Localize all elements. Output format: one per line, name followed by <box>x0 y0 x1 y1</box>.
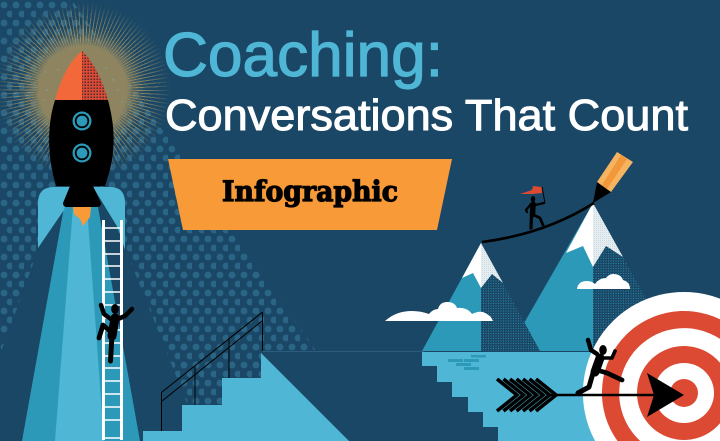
title line 1: Coaching: <box>163 21 443 90</box>
arrow <box>497 373 684 417</box>
rocket nose cone <box>55 51 108 100</box>
orange banner <box>168 159 452 230</box>
right cloud <box>577 274 630 289</box>
halo specks <box>43 67 123 103</box>
stair railing <box>162 312 262 431</box>
left staircase <box>143 353 349 441</box>
arrow shaft <box>550 394 655 396</box>
tightrope <box>482 203 594 242</box>
rocket glow halo <box>0 0 173 178</box>
tightrope walker with flag <box>520 186 545 228</box>
pencil <box>593 152 633 203</box>
small mountain <box>422 243 540 351</box>
rocket wings <box>38 187 125 250</box>
flag <box>520 186 542 194</box>
title line 2: Conversations That Count <box>165 91 688 140</box>
large mountain <box>508 203 675 351</box>
arrow head <box>647 373 684 417</box>
climbing figure <box>99 304 132 361</box>
rocket porthole bottom <box>72 144 92 162</box>
rocket body <box>49 100 114 207</box>
ladder <box>104 220 122 440</box>
rocket flame <box>73 207 91 226</box>
arrow fletching <box>497 379 556 411</box>
running figure <box>578 340 622 393</box>
rocket porthole top <box>72 112 92 130</box>
rocket <box>49 51 114 207</box>
rocket exhaust beam <box>22 207 140 441</box>
left cloud <box>385 302 493 321</box>
water ground with steps <box>422 352 720 441</box>
walker figure <box>526 196 544 228</box>
water ripples <box>448 355 486 370</box>
banner label: Infographic <box>222 175 398 208</box>
target <box>583 292 720 441</box>
